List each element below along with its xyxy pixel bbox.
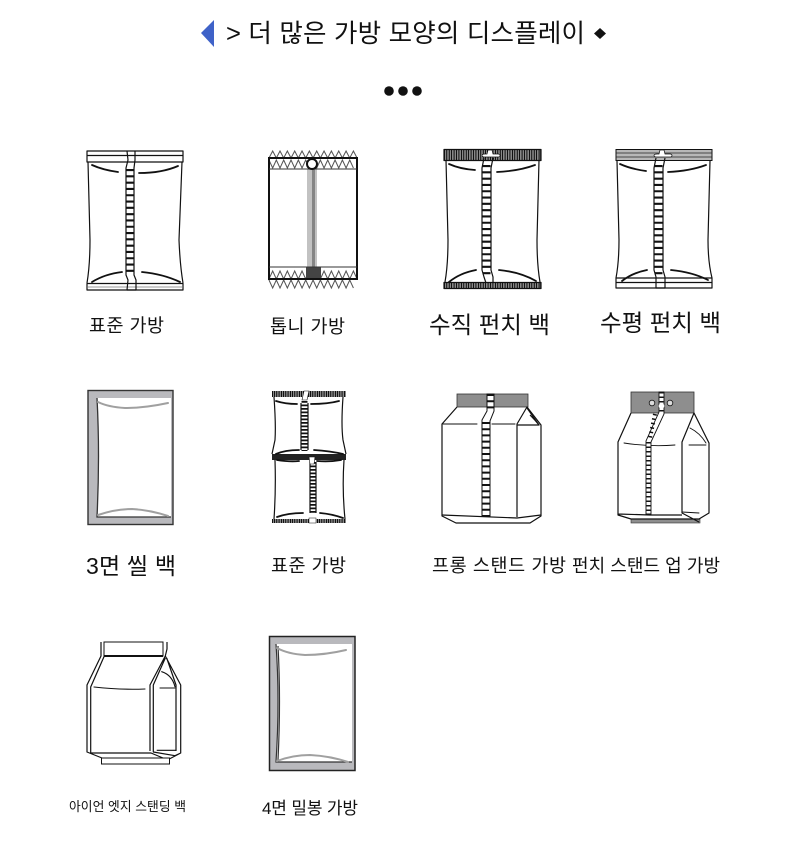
icon: four-side seal bag [270,636,355,770]
label: three-side seal bag: 3면 씰 백 [86,553,176,579]
label: punch stand-up bag: 펀치 스탠드 업 가방 [572,556,720,576]
label: horizontal punch bag: 수평 펀치 백 [600,310,721,336]
icon: three dots [384,86,422,96]
label: four-side seal bag: 4면 밀봉 가방 [262,799,358,818]
label: double standard bag: 표준 가방 [271,555,346,576]
icon: punch stand-up bag [618,392,709,523]
label: standard bag: 표준 가방 [89,315,164,336]
icon: three-side seal bag [88,390,173,524]
icon: double standard bag [272,391,346,523]
icon: serrated bag [269,151,357,288]
icon: vertical punch bag [444,150,541,288]
icon: standard bag [87,151,183,290]
icon: blue left marker [201,20,214,47]
label: prong stand bag: 프롱 스탠드 가방 [432,555,566,576]
header [201,20,606,96]
icon: prong stand bag [442,394,541,523]
label: serrated bag: 톱니 가방 [270,316,345,337]
title: > 더 많은 가방 모양의 디스플레이 [226,20,585,48]
label: vertical punch bag: 수직 펀치 백 [429,312,550,338]
label: iron edge stand bag: 아이언 엣지 스탠딩 백 [69,799,186,814]
icon: horizontal punch bag [616,150,712,288]
icon: iron edge stand bag [87,642,181,764]
icon: black diamond [594,28,606,39]
